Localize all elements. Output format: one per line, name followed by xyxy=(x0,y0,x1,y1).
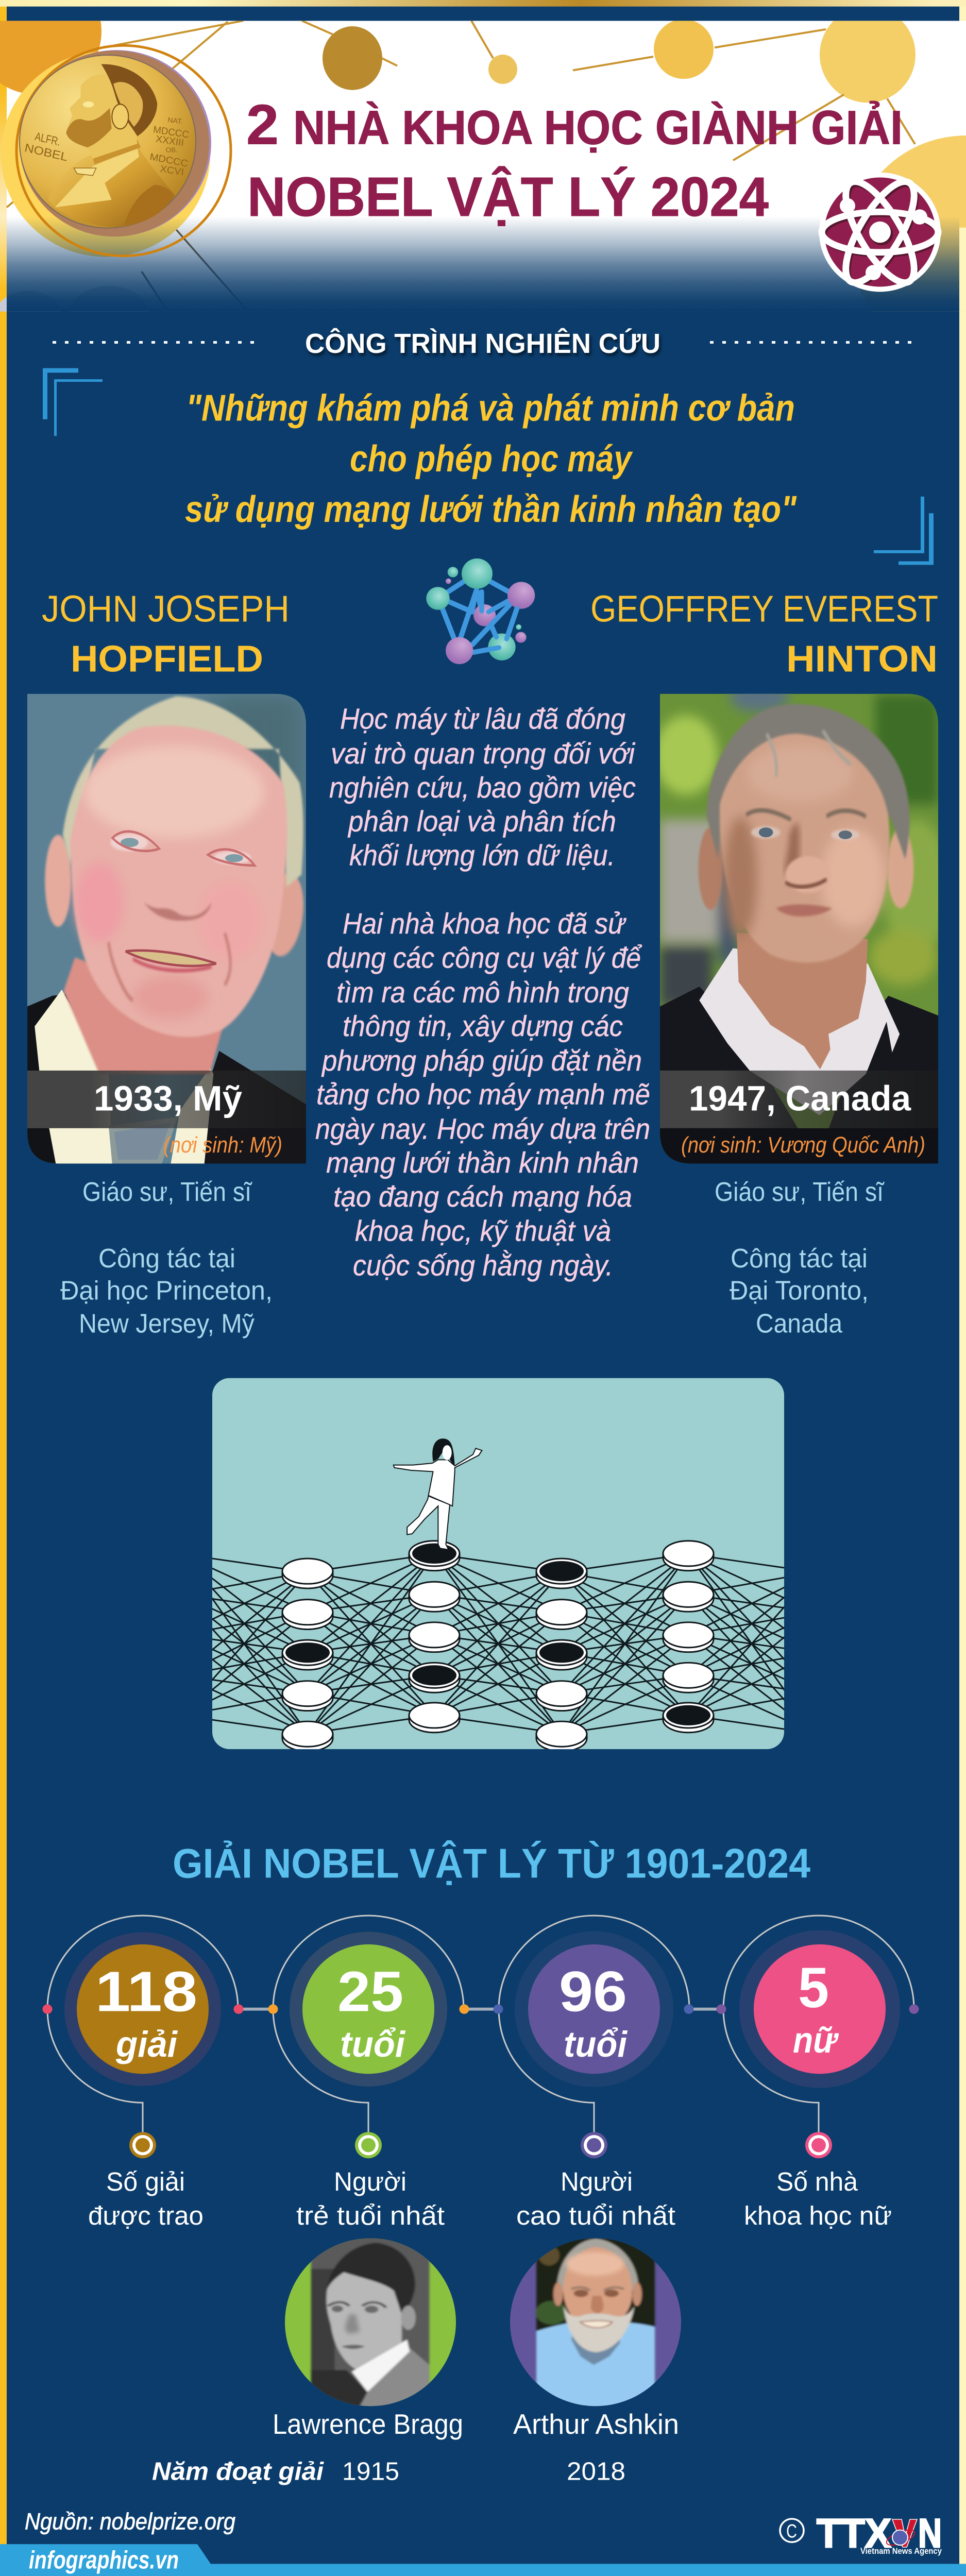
stat: prizes awarded: được trao xyxy=(88,2200,204,2230)
quote: sử dụng mạng lưới thần kinh nhân tạo" xyxy=(185,488,797,530)
affiliation: Hopfield xyxy=(60,1177,273,1338)
title: NOBEL VẬT LÝ 2024 xyxy=(247,166,769,228)
portrait: Hinton xyxy=(654,682,950,1166)
medal inscription: MDCCC xyxy=(149,151,189,169)
footer bar xyxy=(7,2564,966,2576)
network connections xyxy=(181,1554,815,1734)
stat: youngest laureate: Người xyxy=(334,2167,406,2196)
affiliation: Hinton xyxy=(715,1177,885,1338)
portrait: Arthur Ashkin xyxy=(510,2235,681,2412)
balancing figure xyxy=(394,1438,482,1550)
medal inscription: XCVI xyxy=(159,163,184,178)
caption band xyxy=(27,1071,306,1128)
stat: youngest laureate xyxy=(268,1916,469,2230)
award years: 1915 xyxy=(342,2458,399,2485)
affiliation: Hopfield: Công tác tại xyxy=(98,1243,235,1274)
stat: youngest laureate: tuổi xyxy=(340,2024,406,2065)
caption band xyxy=(660,1071,900,1128)
stat: prizes awarded: giải xyxy=(115,2024,178,2065)
medal inscription: NOBEL xyxy=(24,141,69,164)
body text: machine learning: vai trò quan trọng đối với xyxy=(331,738,636,770)
footer tab xyxy=(0,2544,211,2576)
award years: 2018 xyxy=(567,2458,625,2485)
header fade xyxy=(7,216,959,313)
stat: prizes awarded: Số giải xyxy=(106,2167,185,2196)
body text: machine learning: tảng cho học máy mạnh mẽ xyxy=(316,1078,650,1111)
logo: TTXVN xyxy=(780,2511,942,2556)
left yellow stripe xyxy=(0,0,7,2576)
body text: machine learning: khối lượng lớn dữ liệu. xyxy=(349,839,615,872)
laureate names xyxy=(273,2409,679,2440)
caption: birthplace Hinton: (nơi sinh: Vương Quốc Anh) xyxy=(681,1133,925,1158)
header panel xyxy=(0,21,966,312)
caption: birth year Hopfield: 1933, Mỹ xyxy=(94,1078,242,1118)
medal inscription: OB. xyxy=(166,146,178,154)
award years: Năm đoạt giải xyxy=(152,2458,324,2485)
name: Geoffrey Everest Hinton xyxy=(590,588,938,680)
section heading: research: CÔNG TRÌNH NGHIÊN CỨU xyxy=(305,328,660,359)
affiliation: Hopfield: Đại học Princeton, xyxy=(60,1276,273,1306)
logo: TTXVN: N xyxy=(918,2511,942,2556)
top gold bar xyxy=(0,0,966,7)
name: John Joseph Hopfield: HOPFIELD xyxy=(71,638,263,680)
medal xyxy=(16,45,231,256)
body text: machine learning: Hai nhà khoa học đã sử xyxy=(343,907,626,940)
quote: "Những khám phá và phát minh cơ bản xyxy=(186,387,795,429)
quote bracket top-left xyxy=(43,368,103,436)
quote bracket bottom-right xyxy=(874,497,934,565)
name: John Joseph Hopfield: JOHN JOSEPH xyxy=(42,588,290,630)
affiliation: Hinton: Giáo sư, Tiến sĩ xyxy=(715,1177,885,1207)
portrait: Lawrence Bragg xyxy=(285,2235,456,2412)
title: 2 xyxy=(246,93,279,157)
medal inscription: XXXIII xyxy=(155,133,184,148)
stat: youngest laureate: trẻ tuổi nhất xyxy=(296,2200,445,2230)
section heading: statistics: GIẢI NOBEL VẬT LÝ TỪ 1901-2024 xyxy=(173,1840,810,1887)
stat: women laureates: nữ xyxy=(793,2020,839,2061)
body text: machine learning xyxy=(315,703,650,1282)
body text: machine learning: phương pháp giúp đặt nền xyxy=(321,1044,642,1077)
panel: neural network illustration xyxy=(212,1378,784,1750)
stat: oldest laureate: cao tuổi nhất xyxy=(516,2200,675,2230)
affiliation: Hinton: Công tác tại xyxy=(731,1243,868,1274)
right cream stripe xyxy=(959,0,966,2576)
quote: cho phép học máy xyxy=(350,437,633,480)
connectors between stats xyxy=(239,2008,721,2011)
body text: machine learning: thông tin, xây dựng các xyxy=(343,1010,623,1043)
medal inscription xyxy=(24,116,190,178)
body text: machine learning: dụng các công cụ vật lý để xyxy=(327,942,642,975)
affiliation: Hopfield: Giáo sư, Tiến sĩ xyxy=(82,1177,252,1207)
photo panel: Hopfield xyxy=(27,694,310,1166)
stat: women laureates xyxy=(716,1916,919,2230)
name: John Joseph Hopfield xyxy=(42,588,290,680)
body text: machine learning: phân loại và phân tích xyxy=(347,805,616,838)
portrait: Hopfield xyxy=(27,697,310,1166)
logo: TTXVN: TTX xyxy=(817,2511,891,2556)
title: NHÀ KHOA HỌC GIÀNH GIẢI xyxy=(293,101,903,155)
logo: TTXVN: Vietnam News Agency xyxy=(860,2546,942,2556)
award years xyxy=(152,2458,625,2485)
stat: women laureates: 5 xyxy=(798,1956,829,2020)
stat: oldest laureate: Người xyxy=(561,2167,633,2196)
network nodes xyxy=(282,1541,714,1751)
body text: machine learning: ngày nay. Học máy dựa trên xyxy=(315,1113,650,1145)
gold spheres and links xyxy=(0,21,966,312)
icon: molecule xyxy=(426,558,535,664)
body text: machine learning: cuộc sống hằng ngày. xyxy=(353,1249,613,1282)
medal inscription: ALFR. xyxy=(34,129,62,148)
stat: oldest laureate: tuổi xyxy=(564,2024,628,2065)
stat: prizes awarded xyxy=(42,1916,243,2230)
icon: atom xyxy=(819,173,941,293)
caption: birth year Hinton: 1947, Canada xyxy=(689,1078,911,1118)
medal inscription: MDCCC xyxy=(152,124,190,140)
body text: machine learning: tạo đang cách mạng hóa xyxy=(333,1180,632,1213)
Alfred Nobel profile xyxy=(24,64,190,227)
stat: prizes awarded: 118 xyxy=(95,1960,197,2023)
footer site name: infographics.vn xyxy=(29,2546,179,2574)
laureate names: Lawrence Bragg xyxy=(273,2409,463,2440)
stat: youngest laureate: 25 xyxy=(337,1960,403,2023)
body text: machine learning: mạng lưới thần kinh nhân xyxy=(326,1147,639,1179)
caption: birthplace Hopfield: (nơi sinh: Mỹ) xyxy=(163,1133,282,1158)
stat: oldest laureate xyxy=(494,1916,693,2230)
source: Nguồn: nobelprize.org xyxy=(25,2509,235,2535)
body text: machine learning: khoa học, kỹ thuật và xyxy=(355,1215,611,1248)
yellow disc behind medal xyxy=(1,52,210,257)
body text: machine learning: Học máy từ lâu đã đóng xyxy=(340,703,625,735)
name: Geoffrey Everest Hinton: HINTON xyxy=(786,638,938,680)
medal ring xyxy=(16,45,231,256)
medal inscription: NAT. xyxy=(167,116,183,126)
quote xyxy=(185,387,797,530)
stat: women laureates: Số nhà xyxy=(776,2167,858,2196)
affiliation: Hopfield: New Jersey, Mỹ xyxy=(79,1309,255,1338)
photo panel: Hinton xyxy=(654,682,950,1166)
body text: machine learning: tìm ra các mô hình trong xyxy=(336,976,629,1009)
stat: oldest laureate: 96 xyxy=(559,1960,627,2023)
laureate names: Arthur Ashkin xyxy=(513,2409,679,2440)
affiliation: Hinton: Đại Toronto, xyxy=(730,1276,869,1306)
affiliation: Hinton: Canada xyxy=(756,1309,843,1338)
title xyxy=(246,93,903,228)
logo: TTXVN: C xyxy=(786,2520,797,2541)
top navy bar xyxy=(7,7,959,21)
stat: women laureates: khoa học nữ xyxy=(744,2200,892,2230)
body text: machine learning: nghiên cứu, bao gồm việc xyxy=(329,771,636,804)
